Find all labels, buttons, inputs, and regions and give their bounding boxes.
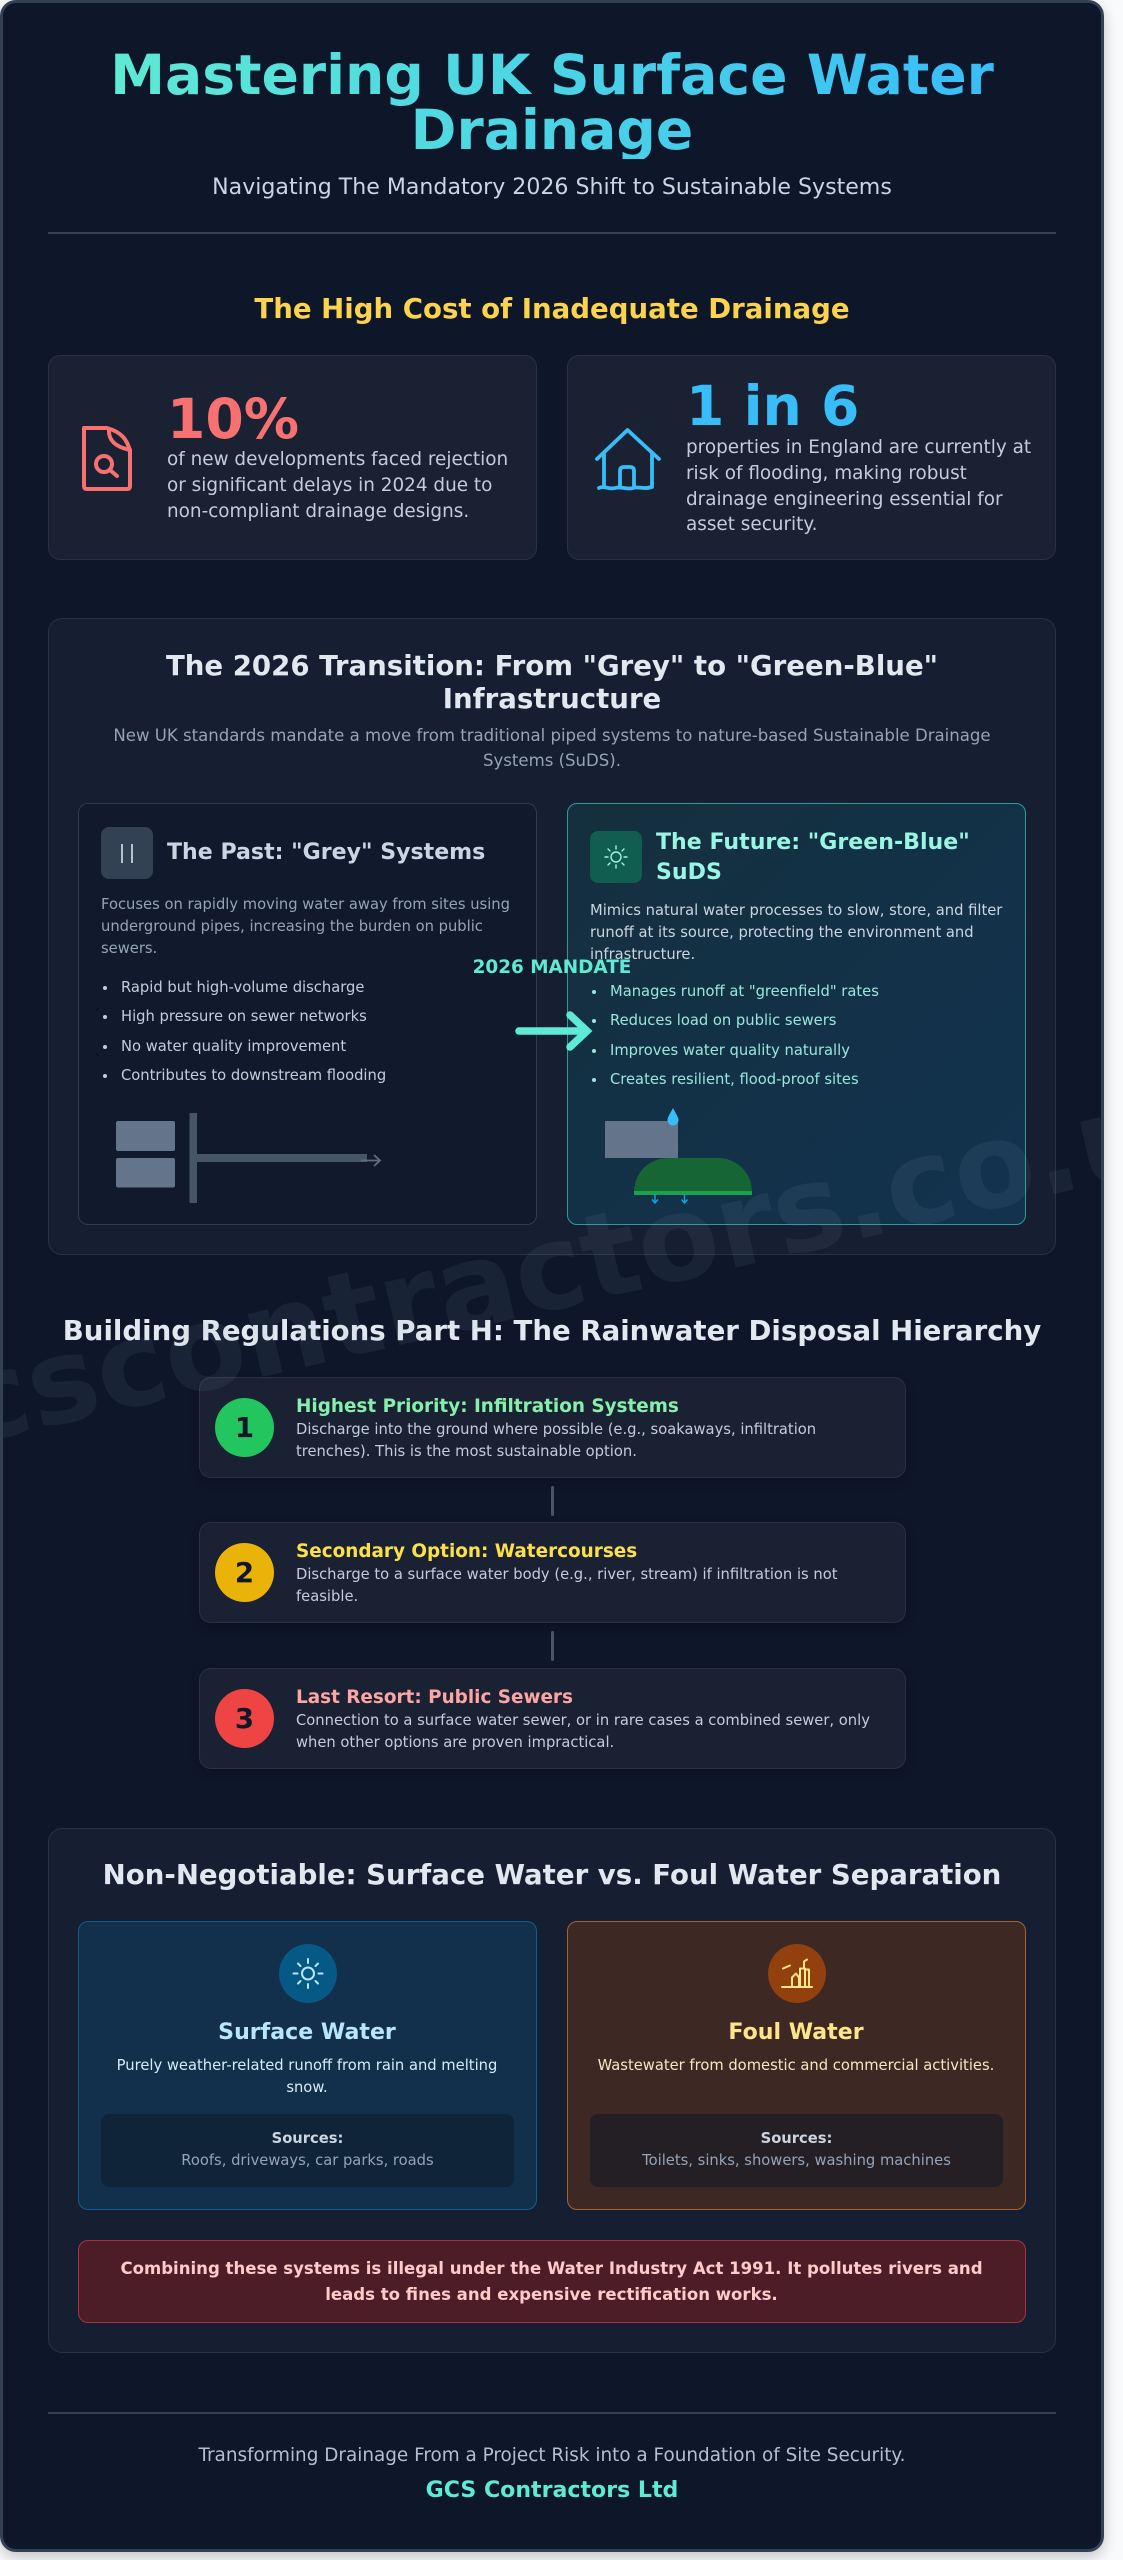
panel: 2026 transition bbox=[48, 618, 1056, 1255]
panel: separation bbox=[48, 1828, 1056, 2353]
panel: the past grey systems bbox=[78, 803, 537, 1225]
sources list: Toilets, sinks, showers, washing machines bbox=[642, 2152, 951, 2169]
title: Drainage bbox=[411, 99, 693, 163]
transition intro text: New UK standards mandate a move from traditional piped systems to nature-based Sustainable Drainage bbox=[113, 726, 991, 745]
footer tagline: Transforming Drainage From a Project Risk into a Foundation of Site Security. bbox=[198, 2445, 906, 2466]
sources label: Sources: bbox=[761, 2130, 832, 2147]
step description bbox=[296, 1566, 838, 1605]
transition intro text: Systems (SuDS). bbox=[483, 751, 621, 770]
stat description: or significant delays in 2024 due to bbox=[167, 475, 492, 496]
stat value: 1 in 6 bbox=[686, 375, 859, 439]
stat description: asset security. bbox=[686, 514, 817, 535]
past description: Focuses on rapidly moving water away from sites using bbox=[101, 896, 510, 913]
icon: sun bbox=[590, 831, 642, 883]
heading: transition: The 2026 Transition: From "Grey" to "Green-Blue" bbox=[166, 649, 938, 682]
step description: Discharge into the ground where possible (e.g., soakaways, infiltration bbox=[296, 1421, 816, 1438]
surface water title: Surface Water bbox=[218, 2020, 396, 2045]
icon: sun bbox=[279, 1944, 337, 2003]
past description bbox=[101, 896, 510, 957]
step description bbox=[296, 1421, 816, 1460]
step title: Secondary Option: Watercourses bbox=[296, 1541, 637, 1562]
future description: runoff at its source, protecting the environment and bbox=[590, 924, 974, 941]
connector 2 bbox=[551, 1631, 554, 1661]
warning text: leads to fines and expensive rectification works. bbox=[325, 2285, 778, 2304]
stat description: properties in England are currently at bbox=[686, 437, 1031, 458]
foul water description: Wastewater from domestic and commercial activities. bbox=[598, 2057, 994, 2074]
sources box bbox=[101, 2114, 514, 2187]
footer divider bbox=[48, 2412, 1056, 2414]
future bullet list: Creates resilient, flood-proof sites bbox=[610, 1071, 859, 1088]
future bullet list: Manages runoff at "greenfield" rates bbox=[610, 983, 879, 1000]
stat value: 10% bbox=[167, 388, 299, 452]
future bullet list: Improves water quality naturally bbox=[610, 1042, 850, 1058]
future description bbox=[590, 902, 1002, 963]
number badge 1 bbox=[215, 1398, 274, 1457]
panel: stat 10 percent bbox=[48, 355, 537, 560]
future description: infrastructure. bbox=[590, 946, 695, 963]
step description: Connection to a surface water sewer, or in rare cases a combined sewer, only bbox=[296, 1712, 870, 1729]
surface water description bbox=[117, 2057, 497, 2096]
connector 1 bbox=[551, 1486, 554, 1516]
stat description: risk of flooding, making robust bbox=[686, 463, 967, 484]
past description: sewers. bbox=[101, 940, 157, 957]
step description: trenches). This is the most sustainable option. bbox=[296, 1443, 637, 1460]
panel: foul water bbox=[567, 1921, 1026, 2210]
transition intro text bbox=[113, 726, 991, 770]
label: 2026 mandate: 2026 MANDATE bbox=[473, 957, 631, 978]
past bullet list: High pressure on sewer networks bbox=[121, 1008, 367, 1025]
step description: Discharge to a surface water body (e.g., river, stream) if infiltration is not bbox=[296, 1566, 837, 1583]
subtitle: Navigating The Mandatory 2026 Shift to Sustainable Systems bbox=[212, 175, 892, 200]
heading: transition bbox=[166, 649, 938, 715]
future description: Mimics natural water processes to slow, store, and filter bbox=[590, 902, 1002, 919]
icon: flooded house bbox=[595, 428, 661, 490]
header divider bbox=[48, 232, 1056, 234]
step title: Last Resort: Public Sewers bbox=[296, 1687, 573, 1708]
icon: document search bbox=[82, 426, 132, 491]
past bullet list: No water quality improvement bbox=[121, 1038, 346, 1054]
past description: underground pipes, increasing the burden on public bbox=[101, 918, 483, 935]
surface water description: Purely weather-related runoff from rain and melting bbox=[117, 2057, 497, 2074]
stat description bbox=[686, 437, 1031, 535]
step 1: infiltration bbox=[199, 1377, 906, 1478]
icon: factory bbox=[768, 1944, 826, 2003]
heading: part h hierarchy: Building Regulations Part H: The Rainwater Disposal Hierarchy bbox=[63, 1314, 1041, 1347]
callout: illegal warning bbox=[78, 2240, 1026, 2323]
arrow: transition bbox=[515, 1011, 592, 1051]
foul water title: Foul Water bbox=[728, 2020, 864, 2045]
stat description bbox=[167, 449, 508, 522]
heading: transition: Infrastructure bbox=[443, 682, 661, 715]
number badge 3: 3 bbox=[235, 1702, 254, 1735]
step title: Highest Priority: Infiltration Systems bbox=[296, 1396, 679, 1417]
panel: surface water bbox=[78, 1921, 537, 2210]
past bullet list: Contributes to downstream flooding bbox=[121, 1067, 386, 1084]
number badge 2: 2 bbox=[235, 1556, 254, 1589]
warning text bbox=[120, 2259, 983, 2304]
heading: high cost: The High Cost of Inadequate Drainage bbox=[254, 292, 850, 325]
stat description: of new developments faced rejection bbox=[167, 449, 508, 470]
icon: pipes bbox=[101, 827, 153, 879]
future title bbox=[656, 830, 970, 884]
number badge 3 bbox=[215, 1689, 274, 1748]
title bbox=[108, 49, 996, 159]
heading: separation: Non-Negotiable: Surface Water vs. Foul Water Separation bbox=[103, 1858, 1001, 1891]
step description bbox=[296, 1712, 870, 1751]
surface water description: snow. bbox=[286, 2079, 328, 2096]
future title: SuDS bbox=[656, 860, 722, 884]
future bullet list: Reduces load on public sewers bbox=[610, 1012, 836, 1029]
future bullet list bbox=[592, 983, 879, 1088]
number badge 2 bbox=[215, 1543, 274, 1602]
step 2: watercourses bbox=[199, 1522, 906, 1623]
future title: The Future: "Green-Blue" bbox=[656, 830, 970, 855]
sources list: Roofs, driveways, car parks, roads bbox=[181, 2152, 434, 2169]
title: Mastering UK Surface Water bbox=[110, 44, 994, 108]
step description: feasible. bbox=[296, 1588, 358, 1605]
past title: The Past: "Grey" Systems bbox=[167, 840, 485, 865]
panel: stat 1 in 6 bbox=[567, 355, 1056, 560]
number badge 1: 1 bbox=[235, 1411, 254, 1444]
step description: when other options are proven impractical. bbox=[296, 1734, 614, 1751]
step 3: public sewers bbox=[199, 1668, 906, 1769]
panel: the future green-blue suds bbox=[567, 803, 1026, 1225]
sources label: Sources: bbox=[272, 2130, 343, 2147]
footer company name: GCS Contractors Ltd bbox=[426, 2478, 678, 2503]
stat description: non-compliant drainage designs. bbox=[167, 501, 469, 522]
past bullet list: Rapid but high-volume discharge bbox=[121, 979, 364, 996]
warning text: Combining these systems is illegal under the Water Industry Act 1991. It pollutes rivers and bbox=[120, 2259, 983, 2278]
stat description: drainage engineering essential for bbox=[686, 489, 1003, 510]
grey system diagram bbox=[116, 1113, 382, 1203]
past bullet list bbox=[103, 979, 386, 1084]
suds diagram bbox=[605, 1108, 752, 1204]
sources box bbox=[590, 2114, 1003, 2187]
